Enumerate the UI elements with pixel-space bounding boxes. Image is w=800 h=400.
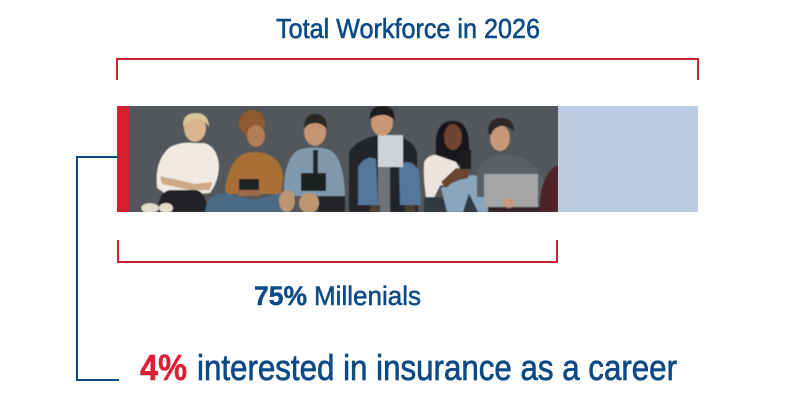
bar: total workforce remainder xyxy=(558,106,698,212)
photo: six millennials seated against a wall xyxy=(129,106,558,213)
callout: 4% interested in insurance: 4% xyxy=(140,347,187,388)
person 5 xyxy=(424,121,489,212)
label: 75% millennials xyxy=(254,281,421,311)
bracket: total workforce xyxy=(117,59,698,80)
label: 75% millennials: Millenials xyxy=(314,281,421,311)
connector line xyxy=(77,157,119,380)
person 2 xyxy=(205,110,285,212)
person 3 xyxy=(279,114,345,213)
person 4 xyxy=(349,106,421,212)
person 1 xyxy=(141,113,219,213)
bar: insurance interest segment xyxy=(117,106,129,212)
bracket: millennials xyxy=(118,240,557,262)
title: Total Workforce in 2026 xyxy=(276,13,540,44)
person 6 xyxy=(477,118,558,212)
callout: 4% interested in insurance: interested in insurance as a career xyxy=(197,347,677,388)
label: 75% millennials: 75% xyxy=(254,281,307,311)
